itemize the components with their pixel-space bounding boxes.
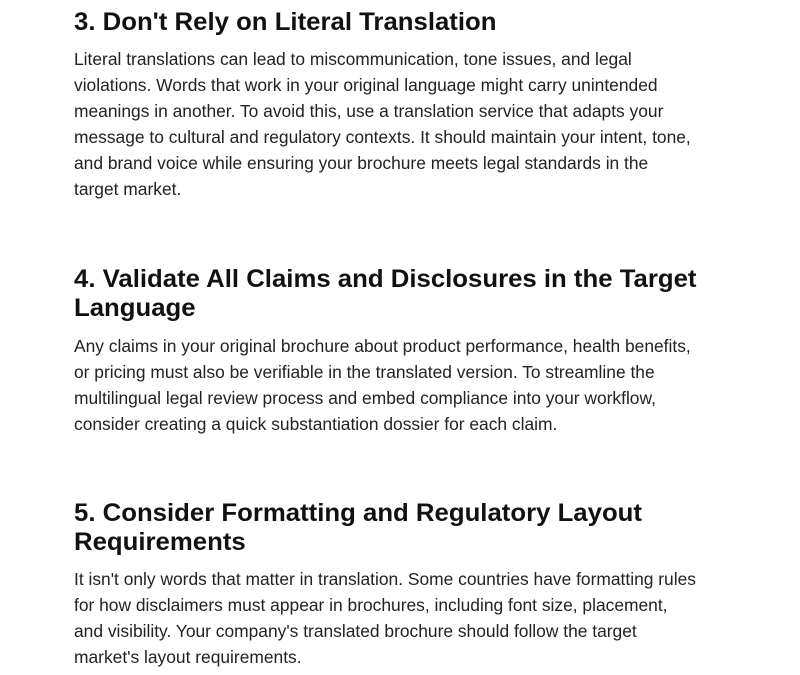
- heading: section 4: [74, 265, 696, 322]
- heading: section 5: Requirements: [74, 528, 246, 556]
- section 3: [74, 8, 691, 199]
- text block: section 5 body: It isn't only words that matter in translation. Some countries have formatting rules: [74, 569, 696, 589]
- text block: section 4 body: consider creating a quick substantiation dossier for each claim.: [74, 414, 557, 434]
- text block: section 5 body: and visibility. Your company's translated brochure should follow the target: [74, 621, 637, 641]
- text block: section 5 body: for how disclaimers must appear in brochures, including font size, placement,: [74, 595, 668, 615]
- section 5: [74, 499, 696, 667]
- text block: section 3 body: violations. Words that work in your original language might carry unintended: [74, 75, 658, 95]
- text block: section 3 body: target market.: [74, 179, 181, 199]
- text block: section 3 body: Literal translations can lead to miscommunication, tone issues, and legal: [74, 49, 632, 69]
- text block: section 4 body: Any claims in your original brochure about product performance, health benefits,: [74, 336, 691, 356]
- text block: section 3 body: meanings in another. To avoid this, use a translation service that adapts your: [74, 101, 663, 121]
- heading: section 4: 4. Validate All Claims and Disclosures in the Target: [74, 265, 696, 293]
- text block: section 3 body: [74, 49, 691, 199]
- heading: section 3: 3. Don't Rely on Literal Translation: [74, 8, 496, 36]
- text block: section 4 body: multilingual legal review process and embed compliance into your workflow,: [74, 388, 656, 408]
- text block: section 5 body: [74, 569, 696, 667]
- heading: section 5: 5. Consider Formatting and Regulatory Layout: [74, 499, 642, 527]
- text block: section 4 body: [74, 336, 691, 434]
- text block: section 3 body: and brand voice while ensuring your brochure meets legal standards in the: [74, 153, 648, 173]
- text block: section 5 body: market's layout requirements.: [74, 647, 302, 667]
- heading: section 5: [74, 499, 642, 556]
- text block: section 3 body: message to cultural and regulatory contexts. It should maintain your intent, tone,: [74, 127, 691, 147]
- text block: section 4 body: or pricing must also be verifiable in the translated version. To streamline the: [74, 362, 655, 382]
- heading: section 4: Language: [74, 294, 196, 322]
- section 4: [74, 265, 696, 434]
